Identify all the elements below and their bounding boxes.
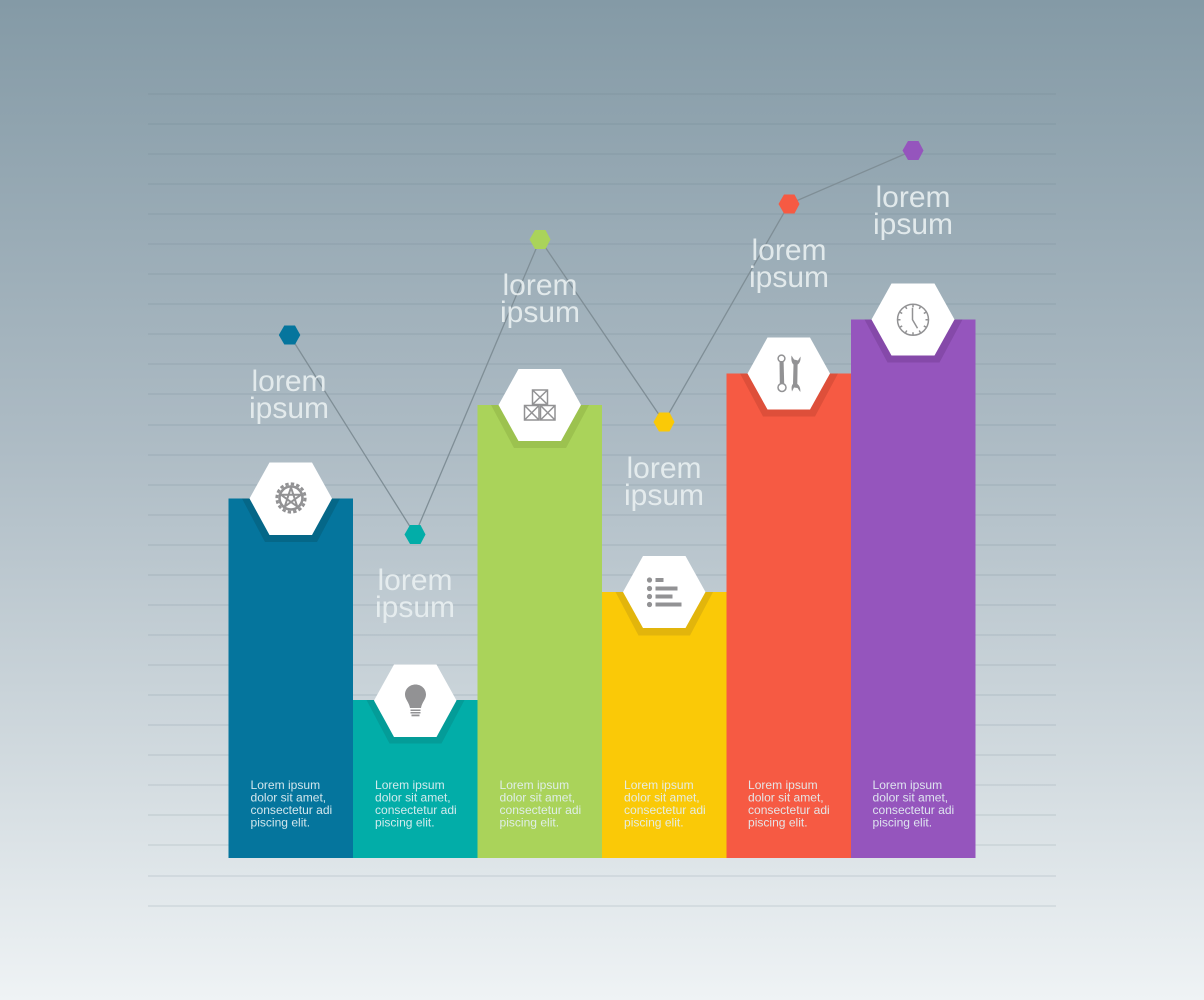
marker: green [530,230,550,249]
label 1: lorem [251,365,327,398]
bar 4 description: dolor sit amet, [624,790,700,804]
bar 3 description: Lorem ipsum [500,778,569,792]
label 2: lorem [377,564,453,597]
label 3: ipsum [500,296,580,329]
bar 4 description: consectetur adi [624,803,706,817]
bar 3 description: consectetur adi [500,803,581,817]
bar 5 description: dolor sit amet, [748,790,824,804]
label 2: ipsum [375,591,455,624]
label 5: ipsum [749,261,829,294]
bar 2 hexagon shadow [366,700,464,744]
label 4: ipsum [624,479,704,512]
bar 3 hexagon shadow [491,405,589,448]
column 1: blue [228,462,353,858]
label 4: lorem [626,452,702,485]
icon: wrenches [778,355,801,392]
label 6: ipsum [873,208,953,241]
bar 6 description: Lorem ipsum [872,778,942,792]
marker: teal [404,525,426,544]
bar 2 description: dolor sit amet, [375,790,451,804]
bar 6 description: dolor sit amet, [872,790,948,804]
column 4: yellow [602,556,726,858]
bar 6 description: consectetur adi [872,803,954,817]
bar 2 hexagon [374,664,456,737]
bar 4 hexagon shadow [616,592,713,636]
bar 5 description: Lorem ipsum [748,778,818,792]
label 1: ipsum [249,392,329,425]
bar 3 description: piscing elit. [500,816,559,830]
bar 1 description: consectetur adi [250,803,332,817]
marker: yellow [654,412,674,432]
bar 3 [478,405,602,858]
bar 5 description: consectetur adi [748,803,830,817]
bar 1 hexagon [250,462,332,535]
bar 1 hexagon shadow [242,498,340,542]
bar 5 hexagon [748,338,830,410]
bar 5 [726,374,851,858]
icon: light bulb [405,684,426,716]
bar 6 hexagon [872,284,954,356]
bar 4 hexagon [623,556,706,628]
icon: stacked boxes [524,390,555,420]
bar 2 description: consectetur adi [375,803,457,817]
marker: purple [902,141,924,160]
bar 3 hexagon [498,369,581,441]
icon: gear [277,484,305,512]
label 6: lorem [875,181,951,214]
bar 5 hexagon shadow [740,374,838,416]
bar 6 hexagon shadow [864,320,962,362]
bar 6 [851,320,976,858]
column 5: red [726,338,851,858]
bar 5 description: piscing elit. [748,816,808,830]
column 3: green [478,369,602,858]
bar 4 [602,592,726,858]
bar 3 description: dolor sit amet, [500,790,575,804]
label 5: lorem [751,234,827,267]
bar 4 description: Lorem ipsum [624,778,694,792]
icon: clock [898,304,928,335]
bar 4 description: piscing elit. [624,816,684,830]
bar 2 description: piscing elit. [375,816,435,830]
bar 1 description: dolor sit amet, [250,790,326,804]
bar 6 description: piscing elit. [872,816,932,830]
marker: blue [279,326,300,344]
column 6: purple [851,284,976,858]
marker: red [778,194,800,214]
bar 1 [228,498,353,858]
icon: list [647,577,682,607]
bar 2 description: Lorem ipsum [375,778,445,792]
label 3: lorem [502,269,578,302]
bar 1 description: Lorem ipsum [250,778,320,792]
bar 2 [353,700,478,858]
column 2: teal [353,664,478,858]
bar 1 description: piscing elit. [250,816,310,830]
line chart connector [290,150,913,534]
